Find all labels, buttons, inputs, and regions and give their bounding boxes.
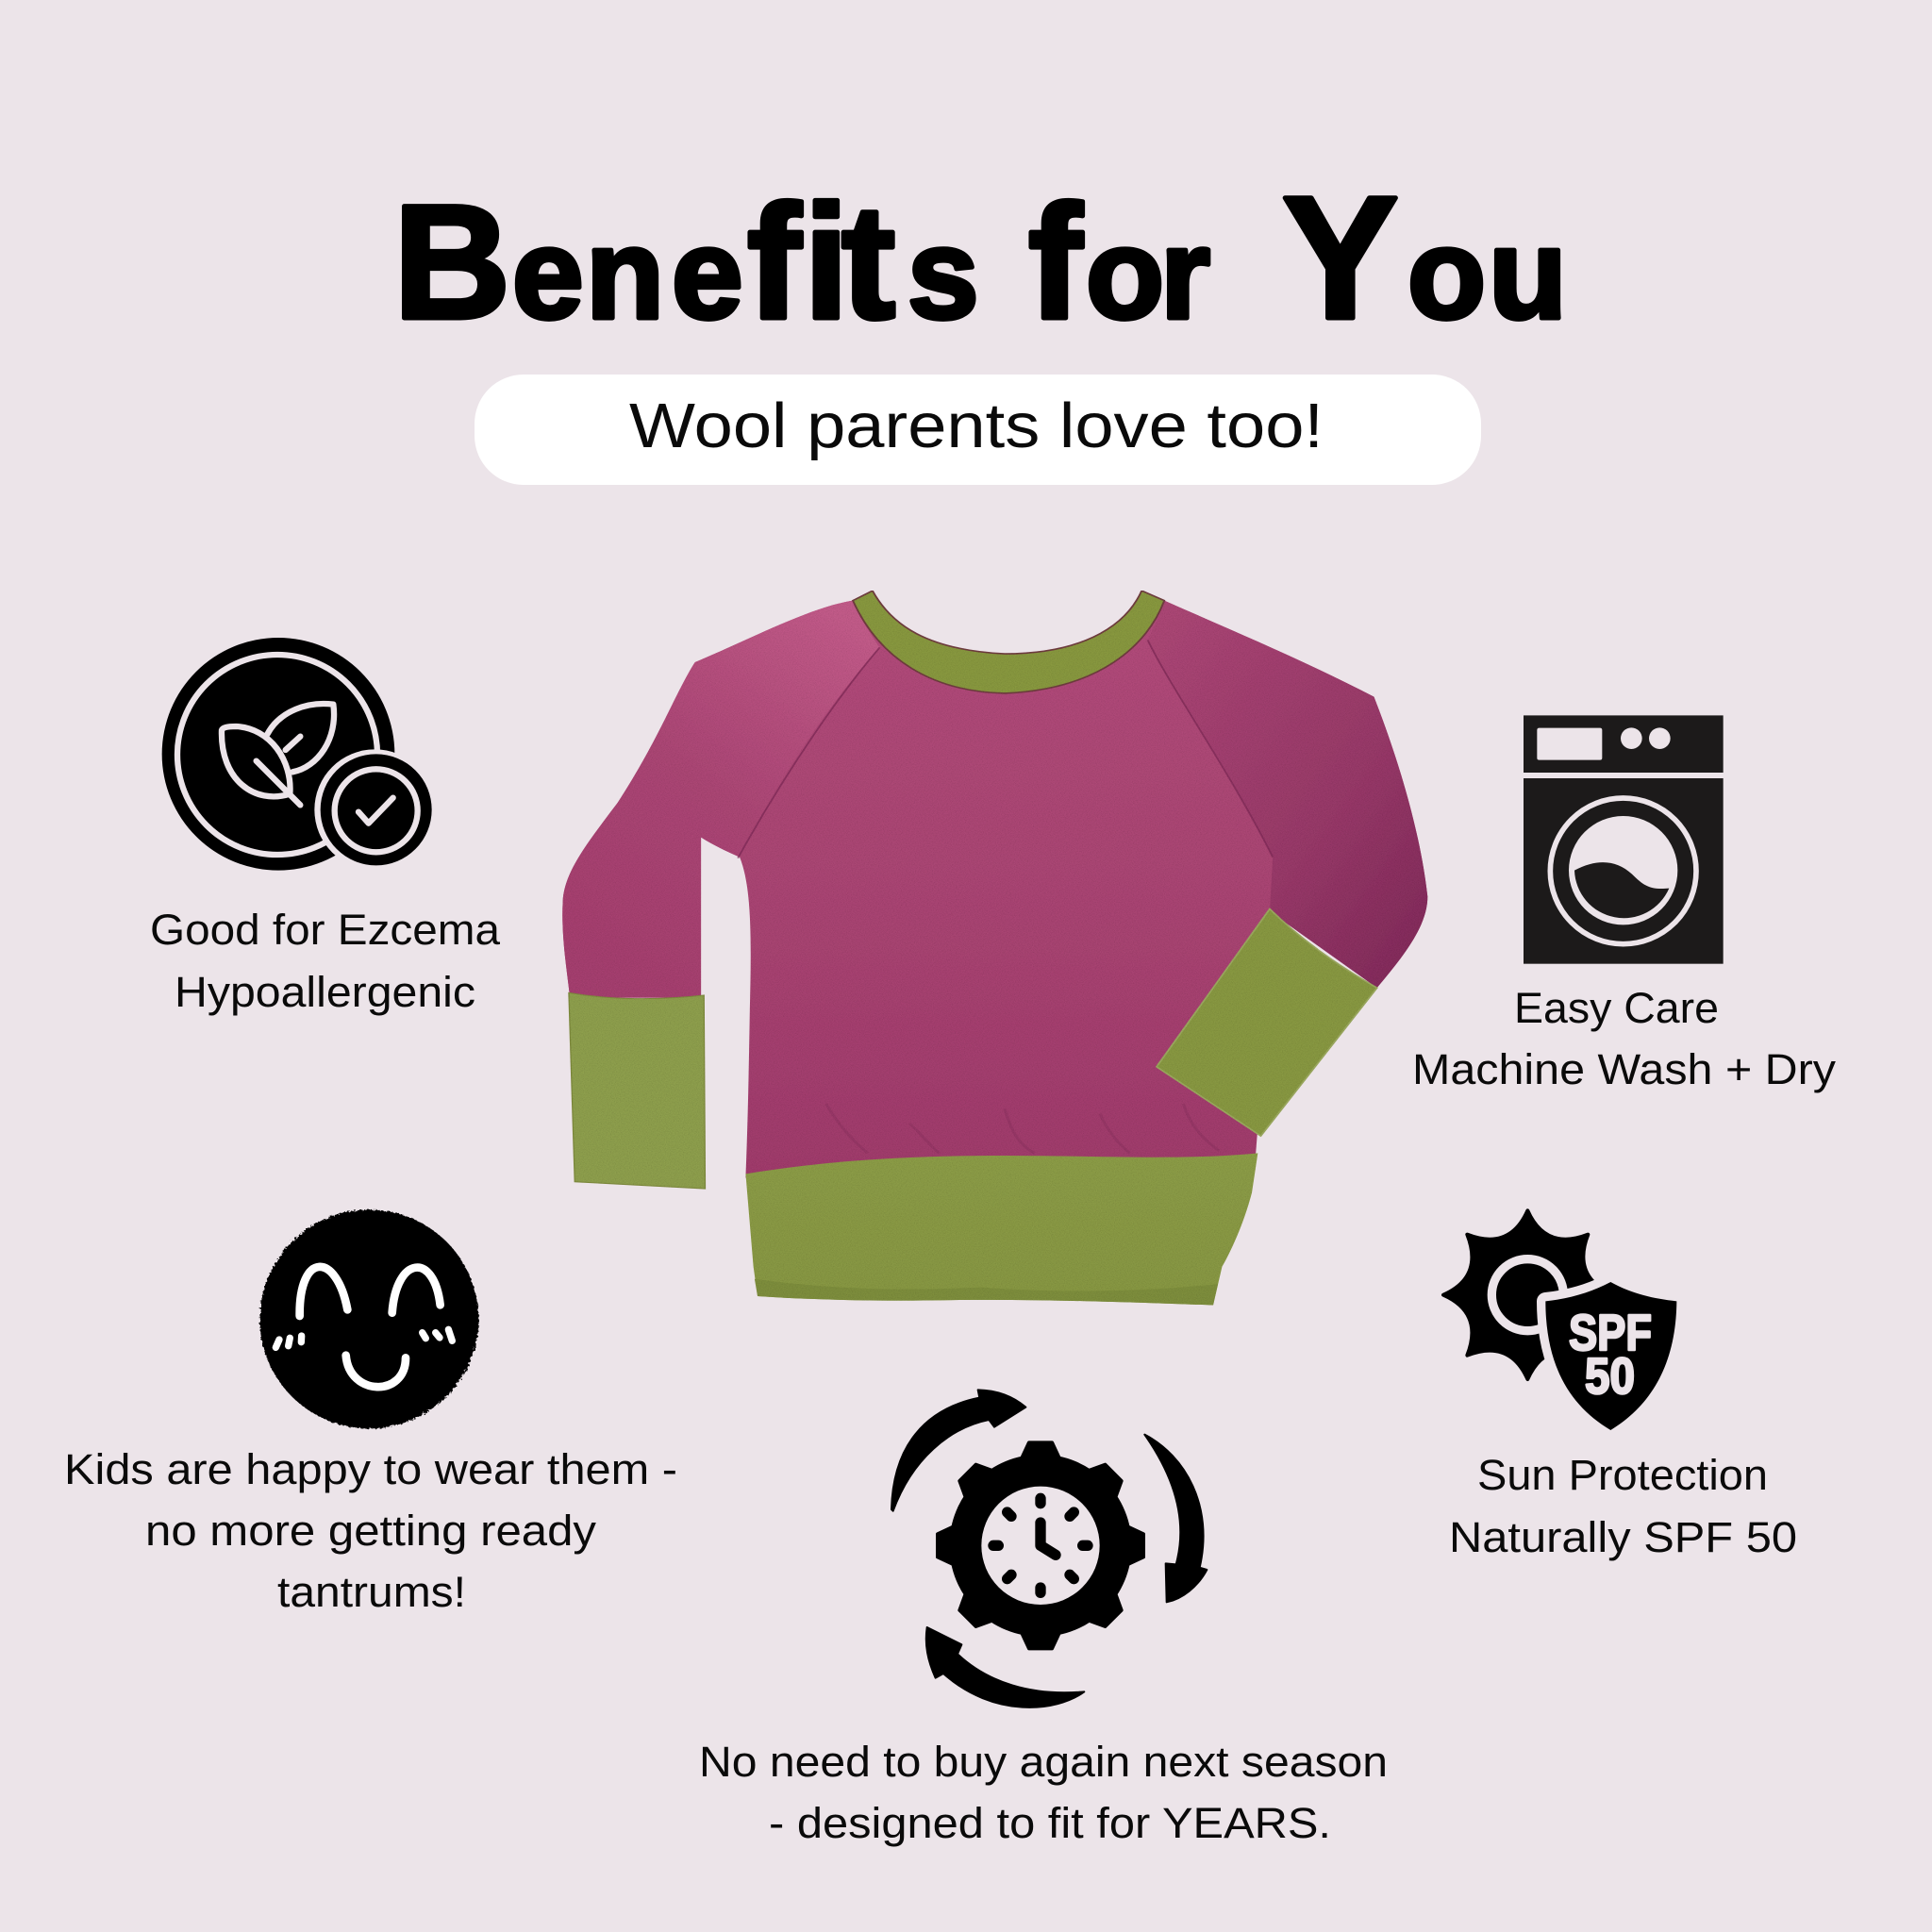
shield text: SPF bbox=[1569, 1305, 1652, 1361]
back of hem bbox=[755, 1279, 1218, 1305]
label: happy kids bbox=[64, 1445, 677, 1616]
label: eczema: Hypoallergenic bbox=[175, 968, 475, 1016]
shield number: 50 bbox=[1585, 1348, 1635, 1405]
outer disc bbox=[162, 638, 394, 871]
label: eczema bbox=[150, 906, 501, 1016]
label: easy care bbox=[1412, 984, 1837, 1093]
label: happy kids: Kids are happy to wear them - bbox=[64, 1445, 677, 1493]
left sleeve shading bbox=[562, 601, 879, 998]
arrow: top bbox=[891, 1390, 1025, 1511]
label: happy kids: no more getting ready bbox=[145, 1507, 597, 1555]
title: ou bbox=[1407, 202, 1567, 345]
door glass bbox=[1569, 816, 1677, 924]
clock ticks and hands bbox=[993, 1498, 1088, 1592]
control panel bbox=[1524, 715, 1724, 773]
right sleeve shading bbox=[1148, 601, 1427, 988]
raglan seams bbox=[738, 640, 1273, 858]
gear bbox=[938, 1442, 1143, 1649]
label: happy kids: tantrums! bbox=[277, 1568, 466, 1616]
hem band bbox=[745, 1153, 1257, 1305]
door ring bbox=[1550, 798, 1696, 944]
sweater photo bbox=[562, 591, 1427, 1305]
title: ene bbox=[512, 202, 743, 345]
water bbox=[1574, 862, 1669, 918]
title: f bbox=[1028, 172, 1083, 353]
label: eczema: Good for Ezcema bbox=[150, 906, 501, 954]
label: easy care: Easy Care bbox=[1514, 984, 1719, 1032]
left cuff bbox=[569, 992, 705, 1189]
buttons bbox=[1621, 727, 1671, 749]
label: fits for years: - designed to fit for YEARS. bbox=[769, 1799, 1331, 1847]
label: sun protection bbox=[1449, 1451, 1797, 1561]
right cuff bbox=[1157, 908, 1377, 1136]
cheek marks bbox=[275, 1329, 452, 1347]
title: fit bbox=[747, 172, 895, 353]
title: Y bbox=[1282, 161, 1398, 356]
neck band bbox=[853, 591, 1164, 693]
eyes and smile bbox=[300, 1267, 441, 1387]
icon: washing machine bbox=[1524, 715, 1724, 964]
sun bbox=[1443, 1210, 1676, 1430]
label: fits for years bbox=[699, 1738, 1388, 1847]
gathered folds bbox=[826, 1104, 1219, 1153]
label: sun protection: Naturally SPF 50 bbox=[1449, 1513, 1797, 1561]
arrow: bottom bbox=[926, 1627, 1084, 1707]
icon: leaf with check bbox=[162, 638, 435, 871]
icon: clock gear with arrows bbox=[891, 1390, 1207, 1707]
icon: sun and SPF shield bbox=[1443, 1210, 1676, 1430]
check badge bbox=[314, 749, 435, 870]
face disc bbox=[259, 1209, 478, 1428]
title: B bbox=[393, 172, 510, 353]
subtitle pill bbox=[475, 375, 1481, 485]
subtitle pill: Wool parents love too! bbox=[629, 391, 1324, 461]
disc ring bbox=[177, 655, 377, 855]
title: or bbox=[1086, 202, 1246, 345]
machine body bbox=[1524, 778, 1724, 964]
arrow: right bbox=[1144, 1435, 1207, 1602]
clock face bbox=[981, 1487, 1100, 1605]
icon: smiley face bbox=[259, 1209, 478, 1428]
title: s bbox=[908, 202, 1014, 345]
label: sun protection: Sun Protection bbox=[1477, 1451, 1768, 1499]
label: easy care: Machine Wash + Dry bbox=[1412, 1045, 1837, 1093]
sweater body and sleeves bbox=[562, 601, 1427, 1178]
leaves bbox=[222, 704, 334, 805]
label: fits for years: No need to buy again next season bbox=[699, 1738, 1388, 1786]
